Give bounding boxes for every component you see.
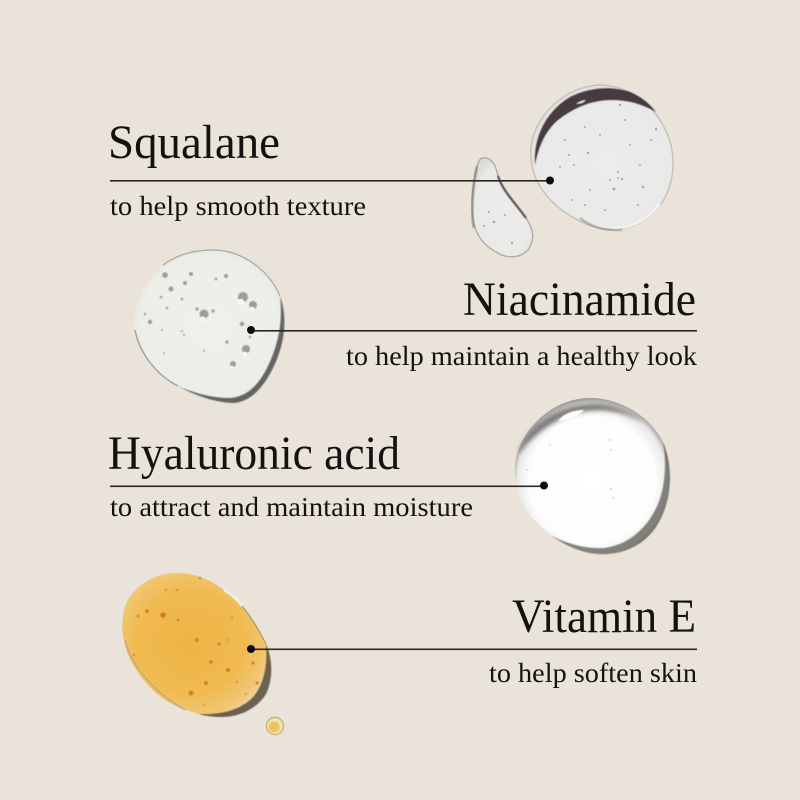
leader line and dot: [247, 326, 697, 334]
large squalane blob: [531, 85, 673, 230]
heading: Niacinamide: Niacinamide: [463, 273, 696, 326]
heading: Hyaluronic acid: Hyaluronic acid: [108, 427, 400, 480]
drop: vitamin E: [122, 573, 284, 735]
description: Squalane: to help smooth texture: [110, 191, 366, 221]
ingredient: Niacinamide: [247, 273, 698, 371]
bubbles: [144, 272, 257, 367]
leader line and dot: [110, 482, 548, 490]
ingredient: Squalane: [108, 116, 554, 221]
ingredient: Vitamin E: [247, 590, 698, 688]
heading: Vitamin E: Vitamin E: [512, 590, 696, 643]
drop: squalane: [472, 85, 673, 257]
description: Niacinamide: to help maintain a healthy look: [346, 341, 698, 371]
ingredient: Hyaluronic acid: [108, 427, 548, 522]
description: Hyaluronic acid: to attract and maintain moisture: [110, 492, 473, 522]
large vitamin E blob: [122, 573, 271, 717]
drop: niacinamide: [135, 250, 284, 403]
small vitamin E droplet: [266, 717, 284, 735]
leader line and dot: [110, 176, 554, 184]
drop: hyaluronic acid: [515, 398, 670, 554]
small squalane teardrop: [472, 158, 533, 257]
leader line and dot: [247, 645, 697, 653]
description: Vitamin E: to help soften skin: [489, 658, 698, 688]
heading: Squalane: Squalane: [108, 116, 280, 169]
